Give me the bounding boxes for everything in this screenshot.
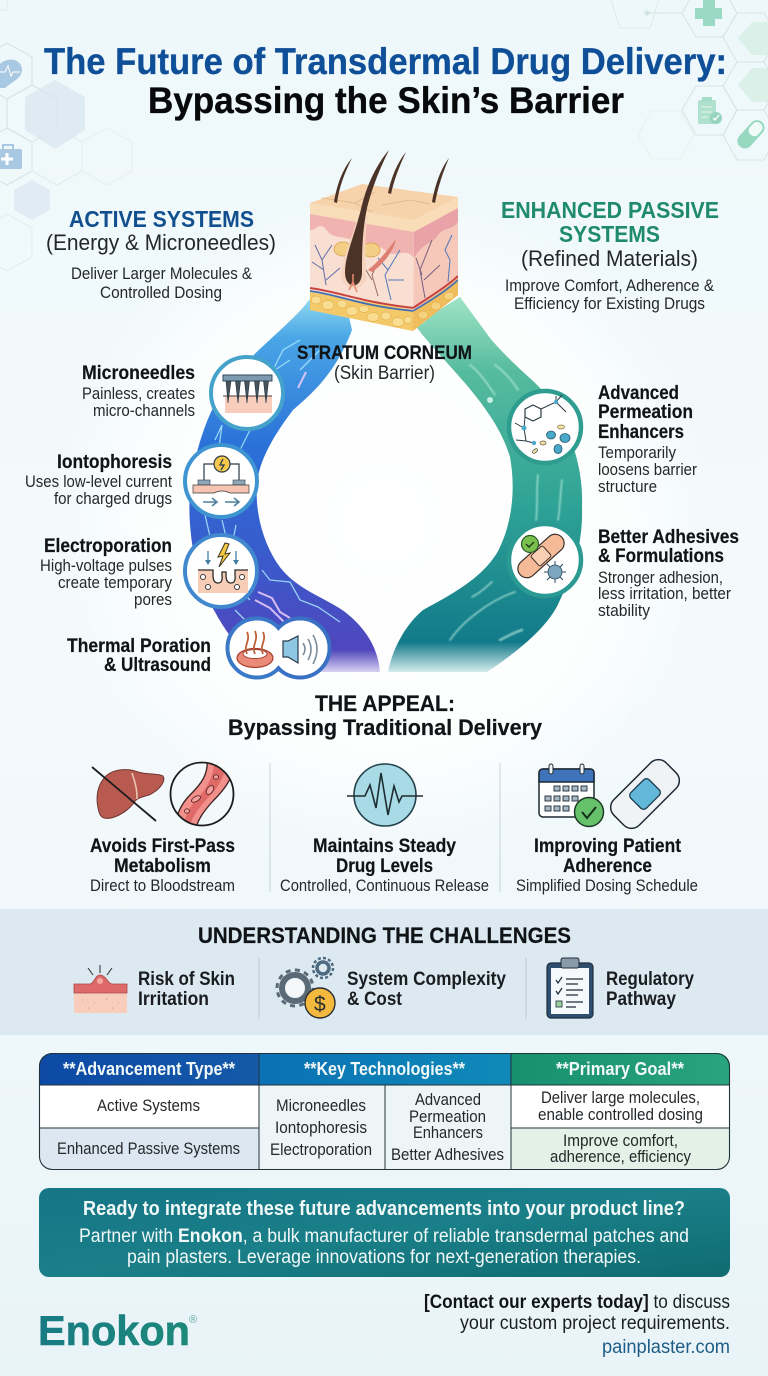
panel: active systems heading: Controlled Dosing [100,283,222,302]
panel: enhanced passive systems heading: (Refined Materials) [521,246,698,271]
panel: improving patient adherence [516,755,698,895]
panel: active systems heading: ACTIVE SYSTEMS [69,206,254,232]
panel: avoids first-pass metabolism [90,758,235,895]
regulatory pathway text [606,968,694,1010]
call to action banner: Ready to integrate these future advancements into your product line? [83,1198,685,1220]
call to action banner [39,1188,730,1277]
panel: active systems heading: (Energy & Microneedles) [46,230,276,255]
icon: iontophoresis [185,445,257,517]
panel: maintains steady drug levels [280,764,489,895]
table body text: Permeation [409,1107,486,1126]
panel: active systems heading: Deliver Larger Molecules & [71,264,253,283]
regulatory pathway text: Regulatory [606,968,694,990]
electroporation text [40,535,173,609]
title [44,41,727,121]
adhesives text: Stronger adhesion, [598,569,723,587]
icon: clipboard [698,97,722,124]
maintains steady text [280,836,489,895]
icon: patch [606,755,684,833]
improving adherence text: Improving Patient [534,836,682,857]
hair follicle and shafts [341,215,368,289]
table body text: adherence, efficiency [550,1147,691,1166]
table body text: Improve comfort, [563,1131,678,1150]
contact text: [Contact our experts today] to discuss [424,1292,730,1313]
icon: medical bag [0,145,22,169]
avoids first-pass text: Direct to Bloodstream [90,877,235,895]
adhesives text: & Formulations [598,545,724,567]
adhesives text: less irritation, better [598,585,731,603]
permeation enhancers text: Enhancers [598,421,684,443]
table body text: Iontophoresis [275,1118,367,1137]
maintains steady text: Maintains Steady [313,836,456,857]
icon: heart pulse [0,60,22,88]
risk of skin irritation text: Irritation [138,988,209,1010]
panel: active systems heading [46,206,276,302]
iontophoresis text: Iontophoresis [57,451,172,473]
table body text: Advanced [415,1090,481,1109]
contact text: your custom project requirements. [460,1313,730,1334]
permeation enhancers text: Temporarily [598,444,677,462]
appeal heading [228,691,542,740]
electroporation text: Electroporation [44,535,172,557]
risk of skin irritation text [138,968,235,1010]
table body text: Enhancers [413,1123,483,1142]
improving adherence text: Adherence [563,856,652,877]
microneedles text: Painless, creates [82,385,195,403]
icon: electroporation [185,535,257,607]
logo: Enokon: ® [189,1314,197,1326]
icon: gears and cost: $ [314,993,326,1016]
background hexagon pattern left [0,0,132,271]
electroporation text: create temporary [58,574,173,592]
system complexity text: System Complexity [347,968,506,990]
regulatory pathway text: Pathway [606,988,676,1010]
icon: clipboard [547,958,593,1018]
title: The Future of Transdermal Drug Delivery: [44,41,727,82]
permeation enhancers text: Permeation [598,401,693,423]
title: Bypassing the Skin’s Barrier [148,80,624,121]
iontophoresis text: for charged drugs [54,490,172,508]
system complexity text: & Cost [347,988,402,1010]
call to action banner: Partner with Enokon, a bulk manufacturer of reliable transdermal patches and [79,1226,689,1247]
adhesives text [598,526,739,620]
table body text: Enhanced Passive Systems [57,1139,240,1158]
permeation enhancers text: Advanced [598,382,679,404]
muscle [368,239,396,272]
risk of skin irritation text: Risk of Skin [138,968,235,990]
iontophoresis text [25,451,172,508]
thermal poration text [67,635,211,676]
thermal poration text: & Ultrasound [104,654,211,676]
microneedles text: Microneedles [82,362,195,384]
icon: liver crossed out [92,767,164,821]
panel: enhanced passive systems heading: SYSTEMS [559,221,660,247]
table body text: Active Systems [97,1096,200,1115]
table headers [63,1058,685,1079]
table body text: Microneedles [276,1096,366,1115]
adhesives text: stability [598,602,651,620]
icon: irritated skin [74,965,127,1013]
table body text [57,1088,703,1166]
stratum corneum label: (Skin Barrier) [334,363,435,384]
panel: understanding the challenges [0,909,768,1035]
microneedles text: micro-channels [93,402,195,420]
icon: cross [695,0,722,26]
permeation enhancers text: structure [598,478,657,496]
icon: gears and cost [277,958,335,1018]
icon: blood vessel [170,762,234,826]
call to action banner: pain plasters. Leverage innovations for next-generation therapies. [127,1247,641,1268]
avoids first-pass text [90,836,235,895]
panel: enhanced passive systems heading: ENHANCED PASSIVE [501,197,719,223]
maintains steady text: Drug Levels [336,856,433,877]
sebaceous glands [334,242,352,256]
contact text: painplaster.com [602,1337,730,1358]
table headers: **Primary Goal** [556,1058,685,1079]
challenges heading: UNDERSTANDING THE CHALLENGES [198,923,571,948]
icon: pill [734,117,768,152]
table body text: Deliver large molecules, [541,1088,700,1107]
background hexagon pattern right [608,0,768,160]
icon: pulse circle [347,764,423,826]
icon: calendar [539,764,604,826]
permeation enhancers text: loosens barrier [598,461,697,479]
stratum corneum label [297,343,472,384]
green passive stream [388,297,582,672]
table body text: Electroporation [270,1140,372,1159]
logo: Enokon: Enokon [38,1307,190,1354]
table body text: enable controlled dosing [538,1105,703,1124]
appeal heading: Bypassing Traditional Delivery [228,715,542,740]
table headers: **Key Technologies** [304,1058,466,1079]
avoids first-pass text: Avoids First-Pass [90,836,235,857]
panel: enhanced passive systems heading [501,197,719,313]
maintains steady text: Controlled, Continuous Release [280,877,489,895]
comparison table [39,1053,730,1170]
icon: permeation enhancers [509,391,581,463]
icon: thermal and ultrasound [228,618,330,678]
panel: enhanced passive systems heading: Efficiency for Existing Drugs [514,294,705,313]
thermal poration text: Thermal Poration [67,635,211,657]
electroporation text: High-voltage pulses [40,557,172,575]
appeal heading: THE APPEAL: [315,691,455,716]
skin cross-section cube [310,150,458,335]
electroporation text: pores [134,591,172,609]
icon: microneedles [211,357,283,429]
microneedles text [82,362,195,420]
icon: adhesives [509,524,581,596]
system complexity text [347,968,506,1010]
adhesives text: Better Adhesives [598,526,739,548]
vessels [312,235,452,300]
stratum corneum label: STRATUM CORNEUM [297,343,472,364]
blue active stream [189,300,380,672]
table headers: **Advancement Type** [63,1058,236,1079]
iontophoresis text: Uses low-level current [25,473,172,491]
improving adherence text: Simplified Dosing Schedule [516,877,698,895]
avoids first-pass text: Metabolism [114,856,211,877]
improving adherence text [516,836,698,895]
panel: enhanced passive systems heading: Improve Comfort, Adherence & [505,276,715,295]
permeation enhancers text [598,382,697,496]
table body text: Better Adhesives [391,1145,504,1164]
contact text [424,1292,730,1358]
